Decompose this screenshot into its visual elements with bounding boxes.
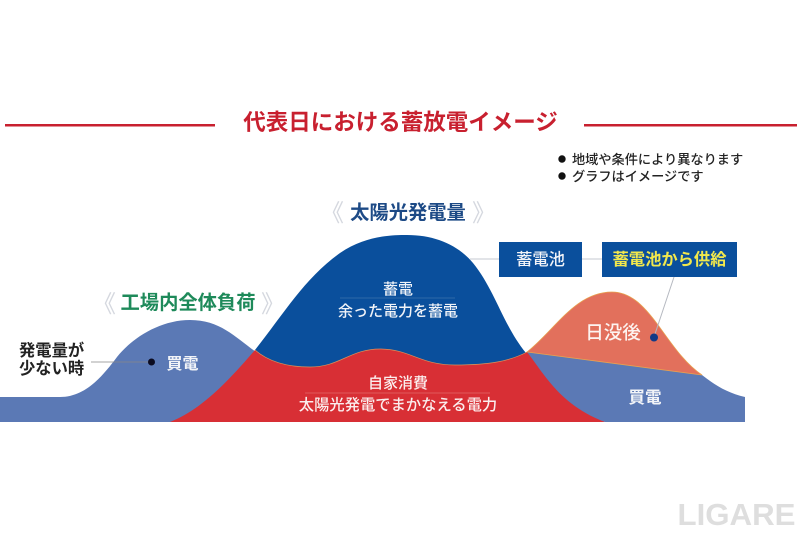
connector: supply to sunset dot bbox=[654, 277, 674, 337]
notes: 地域や条件により異なります bbox=[572, 151, 743, 167]
label: factory load bbox=[92, 291, 285, 318]
label: factory load: 《 bbox=[92, 291, 116, 318]
label: solar generation: 》 bbox=[472, 200, 496, 227]
box: battery: 蓄電池 bbox=[516, 251, 565, 269]
label: solar generation bbox=[320, 200, 496, 227]
notes bbox=[558, 151, 743, 184]
label: stored bbox=[338, 281, 458, 320]
label: factory load: 》 bbox=[261, 291, 285, 318]
label: self consumption: 自家消費 bbox=[368, 375, 428, 392]
connector: between boxes bbox=[582, 258, 602, 260]
marker: sunset dot bbox=[650, 334, 658, 342]
area: battery discharge after sunset bbox=[527, 292, 702, 375]
label: buy morning: 買電 bbox=[166, 355, 199, 373]
title: 代表日における蓄放電イメージ bbox=[243, 110, 558, 135]
box: supplied from battery: 蓄電池から供給 bbox=[613, 251, 727, 269]
label: stored: 蓄電 bbox=[383, 281, 413, 298]
area: self consumption bbox=[170, 349, 605, 422]
label: solar generation: 《 bbox=[320, 200, 344, 227]
label: self consumption bbox=[299, 375, 497, 414]
area: stored solar power bbox=[255, 235, 526, 375]
label: after sunset: 日没後 bbox=[585, 322, 641, 343]
connector: solar to battery box bbox=[470, 258, 499, 260]
title rule right bbox=[584, 124, 797, 126]
label: buy evening: 買電 bbox=[628, 388, 662, 407]
title rule left bbox=[5, 124, 215, 126]
callout: low generation: 少ない時 bbox=[19, 360, 84, 378]
notes: グラフはイメージです bbox=[572, 168, 704, 184]
callout: low generation: 発電量が bbox=[19, 341, 84, 360]
watermark: LIGARE bbox=[678, 497, 796, 532]
label: solar generation: 太陽光発電量 bbox=[350, 202, 466, 224]
label: stored: 余った電力を蓄電 bbox=[338, 303, 458, 320]
label: factory load: 工場内全体負荷 bbox=[121, 291, 255, 314]
boundary line: red top edge bbox=[255, 349, 527, 367]
box: battery bbox=[499, 242, 582, 277]
callout: low generation bbox=[19, 341, 155, 378]
box: supplied from battery bbox=[602, 242, 737, 277]
area: purchased power evening bbox=[527, 352, 745, 422]
label: self consumption: 太陽光発電でまかなえる電力 bbox=[299, 397, 497, 414]
area: purchased power morning bbox=[0, 320, 260, 422]
